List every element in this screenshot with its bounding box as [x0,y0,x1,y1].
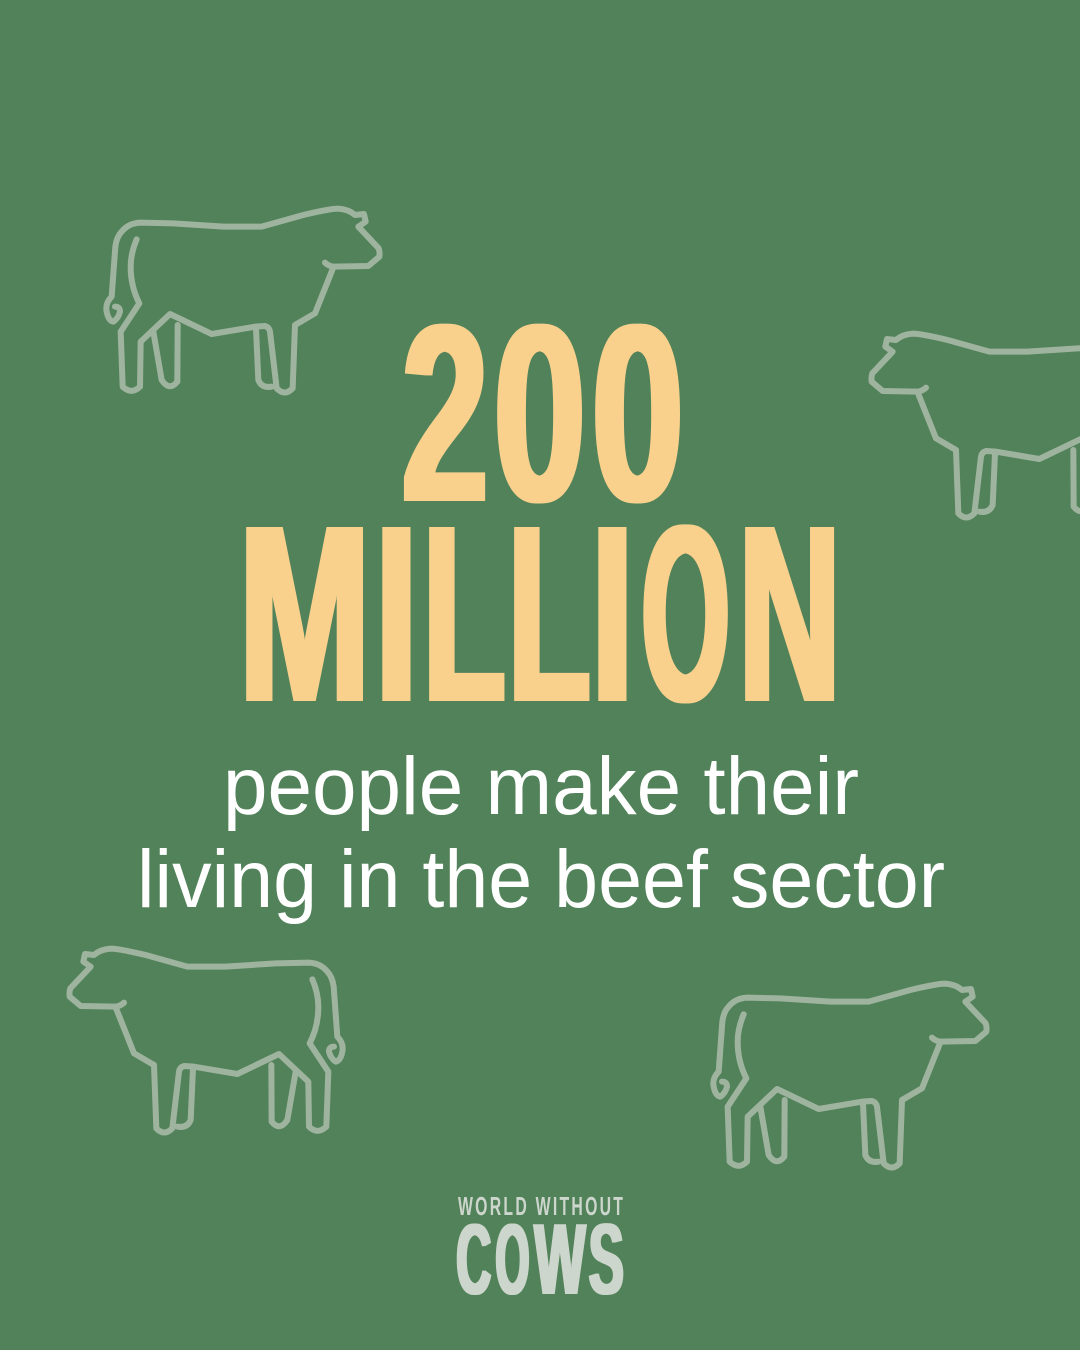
heading: MILLION: O [642,472,730,755]
icon: cow outline bottom right [713,984,987,1167]
logo: World Without Cows: O [496,1204,529,1316]
heading: MILLION: I [375,472,418,755]
icon: cow outline right edge [871,334,1080,517]
heading: MILLION: I [591,472,634,755]
subheading line 2: living in the beef sector [137,834,945,925]
heading: 200: 2 [402,271,488,555]
heading: MILLION: L [508,472,591,755]
logo: World Without Cows: S [589,1204,624,1316]
logo: World Without Cows: WORLD WITHOUT [458,1193,625,1221]
heading: MILLION: L [423,472,506,755]
icon: cow outline bottom left [69,949,343,1132]
heading: MILLION: N [739,472,841,755]
logo: World Without Cows: W [534,1204,586,1316]
logo: World Without Cows: C [456,1204,491,1316]
heading: MILLION: M [239,472,371,755]
subheading line 1: people make their [223,741,859,832]
heading: 200: 0 [592,271,684,555]
heading: 200: 0 [494,271,586,555]
logo: World Without Cows [456,1193,625,1316]
icon: cow outline top left [106,209,380,392]
